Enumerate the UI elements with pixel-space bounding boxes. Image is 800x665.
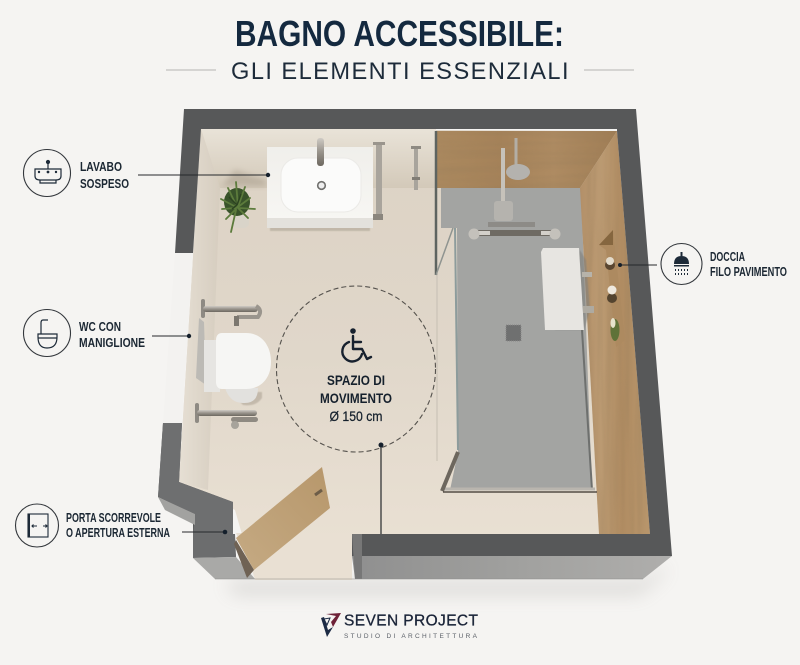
movement space xyxy=(276,286,436,534)
dashed circle xyxy=(276,286,436,452)
callout: doccia filo pavimento: DOCCIA xyxy=(710,250,745,264)
callout: wc con maniglione: WC CON xyxy=(79,319,121,334)
toilet seat xyxy=(216,333,271,389)
wall corner shading xyxy=(222,170,266,186)
shower floor xyxy=(441,188,592,490)
movement label xyxy=(320,372,392,424)
shower rails xyxy=(442,452,597,492)
callout: porta scorrevole: O APERTURA ESTERNA xyxy=(66,526,170,540)
logo: SEVEN PROJECT xyxy=(344,612,479,630)
outer walls xyxy=(158,109,672,558)
title xyxy=(166,13,634,85)
window xyxy=(163,253,193,423)
toilet xyxy=(196,318,271,405)
toilet shadow xyxy=(230,392,262,405)
callout: wc con maniglione xyxy=(24,310,191,356)
floor xyxy=(179,129,650,580)
WC grab bar bottom xyxy=(195,403,258,429)
logo xyxy=(321,612,479,640)
movement label: Ø 150 cm xyxy=(330,408,382,424)
icon: sink xyxy=(35,160,61,183)
plant xyxy=(221,182,255,232)
toilet tank xyxy=(204,340,220,392)
callout: porta scorrevole: PORTA SCORREVOLE xyxy=(66,511,161,525)
wall plate xyxy=(196,318,206,385)
faucet xyxy=(317,138,324,166)
basin xyxy=(281,158,361,212)
toilet bowl xyxy=(225,388,258,403)
sink cabinet xyxy=(267,147,373,219)
movement label: MOVIMENTO xyxy=(320,390,392,406)
shower fixtures xyxy=(488,138,535,227)
wood side wall xyxy=(580,131,650,534)
bottom opening floor mask xyxy=(236,533,352,580)
icon: wheelchair xyxy=(342,328,371,361)
shower bench xyxy=(541,248,594,330)
logo: STUDIO DI ARCHITETTURA xyxy=(344,633,478,640)
shower glass back xyxy=(436,131,592,490)
callout: porta scorrevole xyxy=(16,504,227,547)
wood back wall xyxy=(436,131,617,188)
callout: doccia filo pavimento xyxy=(618,244,787,284)
door xyxy=(234,467,330,578)
callout: lavabo sospeso xyxy=(24,150,270,196)
grab bar xyxy=(468,228,560,240)
drain xyxy=(318,182,325,189)
wall fixture xyxy=(411,146,421,190)
movement label: SPAZIO DI xyxy=(327,372,385,388)
WC grab bar top xyxy=(201,299,260,326)
callout: wc con maniglione: MANIGLIONE xyxy=(79,335,145,350)
floor plan xyxy=(158,109,672,594)
towel rail xyxy=(373,142,385,220)
faint floor line xyxy=(436,275,438,461)
logo mark xyxy=(321,613,341,637)
room shadow xyxy=(225,566,665,594)
leader line xyxy=(378,442,384,534)
callout: lavabo sospeso: LAVABO xyxy=(80,159,122,174)
sink xyxy=(267,138,373,231)
left wall xyxy=(179,129,220,490)
wall front faces xyxy=(158,497,195,525)
callout: lavabo sospeso: SOSPESO xyxy=(80,176,129,191)
title: GLI ELEMENTI ESSENZIALI xyxy=(231,58,570,85)
wall top lower left tone xyxy=(158,423,233,534)
sink shadow xyxy=(270,226,370,231)
icon: toilet xyxy=(38,320,57,348)
icon: shower xyxy=(674,252,689,275)
title: BAGNO ACCESSIBILE: xyxy=(235,13,564,54)
shower drain xyxy=(506,325,521,341)
niche xyxy=(599,230,625,347)
icon: door xyxy=(28,514,48,537)
back wall xyxy=(201,129,436,188)
